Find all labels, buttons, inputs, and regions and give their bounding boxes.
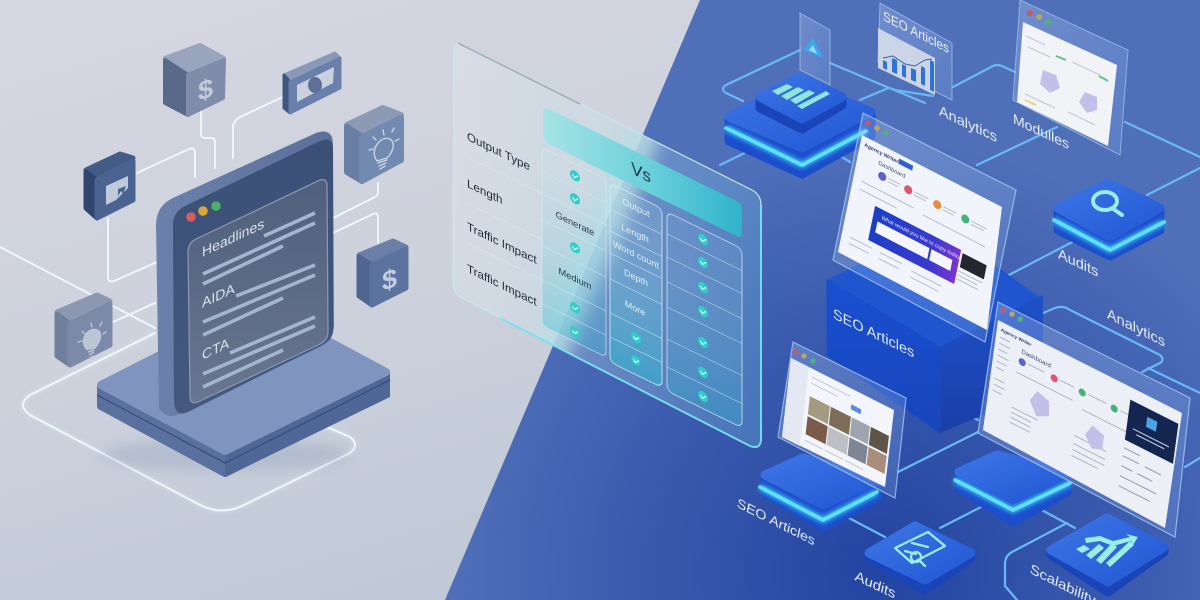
monitor base platform xyxy=(97,342,390,477)
header bar with VS xyxy=(543,106,742,239)
row labels xyxy=(467,129,542,311)
glass card: triangle logo xyxy=(800,13,830,85)
connector lines left xyxy=(0,95,378,510)
photo grid xyxy=(782,358,892,488)
column two: Depth xyxy=(624,267,648,289)
label: Analytics lower: Analytics xyxy=(1107,306,1165,351)
dashboard content xyxy=(844,141,998,311)
stacked block: under small laptop xyxy=(760,458,878,527)
glass card: Modules dashboard xyxy=(1013,0,1128,155)
glass card: small laptop xyxy=(778,342,906,498)
icon cube: cursor xyxy=(86,154,133,218)
frosted diagonal band xyxy=(538,128,666,356)
headline text: CTA: CTA xyxy=(202,336,229,364)
glass panel xyxy=(453,44,761,447)
copy lines two xyxy=(203,265,315,335)
copy lines one xyxy=(203,213,315,284)
icon: growth chart xyxy=(1076,534,1138,567)
table content xyxy=(467,69,742,428)
icon block: banknote xyxy=(284,53,340,113)
column two: More xyxy=(625,299,645,319)
tall block: SEO Articles xyxy=(827,225,1043,433)
stacked block: magnifier xyxy=(1054,183,1164,256)
card label: SEO Articles xyxy=(883,8,949,57)
headline text: AIDA: AIDA xyxy=(202,281,235,312)
label: Audits: Audits xyxy=(1058,246,1099,281)
left scene: ad copy monitor xyxy=(0,45,406,510)
label: SEO Articles lower: SEO Articles xyxy=(737,496,815,550)
row labels: Traffic Impact xyxy=(467,261,537,309)
monitor content glass panel xyxy=(188,180,328,403)
icon cube: lightbulb right xyxy=(347,108,401,181)
row labels: Traffic Impact xyxy=(467,219,537,267)
dashboard content: Agency Writer xyxy=(1001,327,1032,348)
connector lines right xyxy=(720,50,1200,600)
mini chart xyxy=(878,28,935,95)
icon cube: dollar lower right xyxy=(359,241,406,305)
dashboard content: Dashboard xyxy=(1021,348,1052,370)
copy lines three xyxy=(203,317,315,387)
background: blue right half xyxy=(445,0,1200,600)
label: SEO Articles on block: SEO Articles xyxy=(833,306,915,362)
headline text: Headlines: Headlines xyxy=(202,216,264,261)
icon: clipboard and magnifier xyxy=(895,532,945,566)
glass panel top shaded edge xyxy=(458,43,580,104)
stacked block: under centre dashboard xyxy=(955,455,1070,522)
row labels: Output Type xyxy=(467,129,530,174)
dashboard content: Agency Writer xyxy=(864,142,899,165)
icon cube: dollar lower right: $ xyxy=(382,262,397,297)
icon cube: lightbulb lower left xyxy=(57,295,110,365)
column two xyxy=(610,183,662,387)
glass card: large dashboard xyxy=(978,302,1190,537)
row labels: Length xyxy=(467,176,503,207)
icon: magnifier xyxy=(1093,192,1122,215)
label: Modulles: Modulles xyxy=(1013,112,1069,153)
label: Analytics: Analytics xyxy=(939,103,997,146)
modules detail lines xyxy=(1025,36,1108,125)
icon cube: dollar top xyxy=(165,45,224,115)
column one: Medium xyxy=(558,266,592,293)
column three xyxy=(667,212,742,428)
column one: Generate xyxy=(556,210,595,239)
block: scalability chart xyxy=(1051,518,1164,592)
glass card: centre dashboard xyxy=(833,113,1016,342)
hero banner: What would you like to copy today? xyxy=(881,215,963,263)
column two: Word count xyxy=(613,239,659,272)
bars icon xyxy=(772,84,830,109)
comparison glass table xyxy=(452,42,762,448)
icon cube: dollar top: $ xyxy=(198,72,213,107)
glass panel bright edge xyxy=(500,205,761,447)
right scene: SEO platform xyxy=(720,0,1200,600)
glass card: SEO Articles chart xyxy=(878,3,952,100)
dashboard content: Dashboard xyxy=(878,161,906,180)
hero banner xyxy=(868,206,965,286)
dashboard content xyxy=(989,327,1179,510)
column two: Output xyxy=(622,197,650,220)
block: audits clipboard xyxy=(869,526,971,590)
dark promo panel xyxy=(1125,400,1178,464)
stacked block: bar chart top-left xyxy=(726,77,871,174)
column two: Length xyxy=(621,222,649,246)
radar charts xyxy=(1040,70,1097,113)
header bar with VS: Vs xyxy=(631,158,651,187)
monitor window dots xyxy=(186,201,221,222)
monitor body xyxy=(156,132,334,416)
column one xyxy=(542,148,606,357)
